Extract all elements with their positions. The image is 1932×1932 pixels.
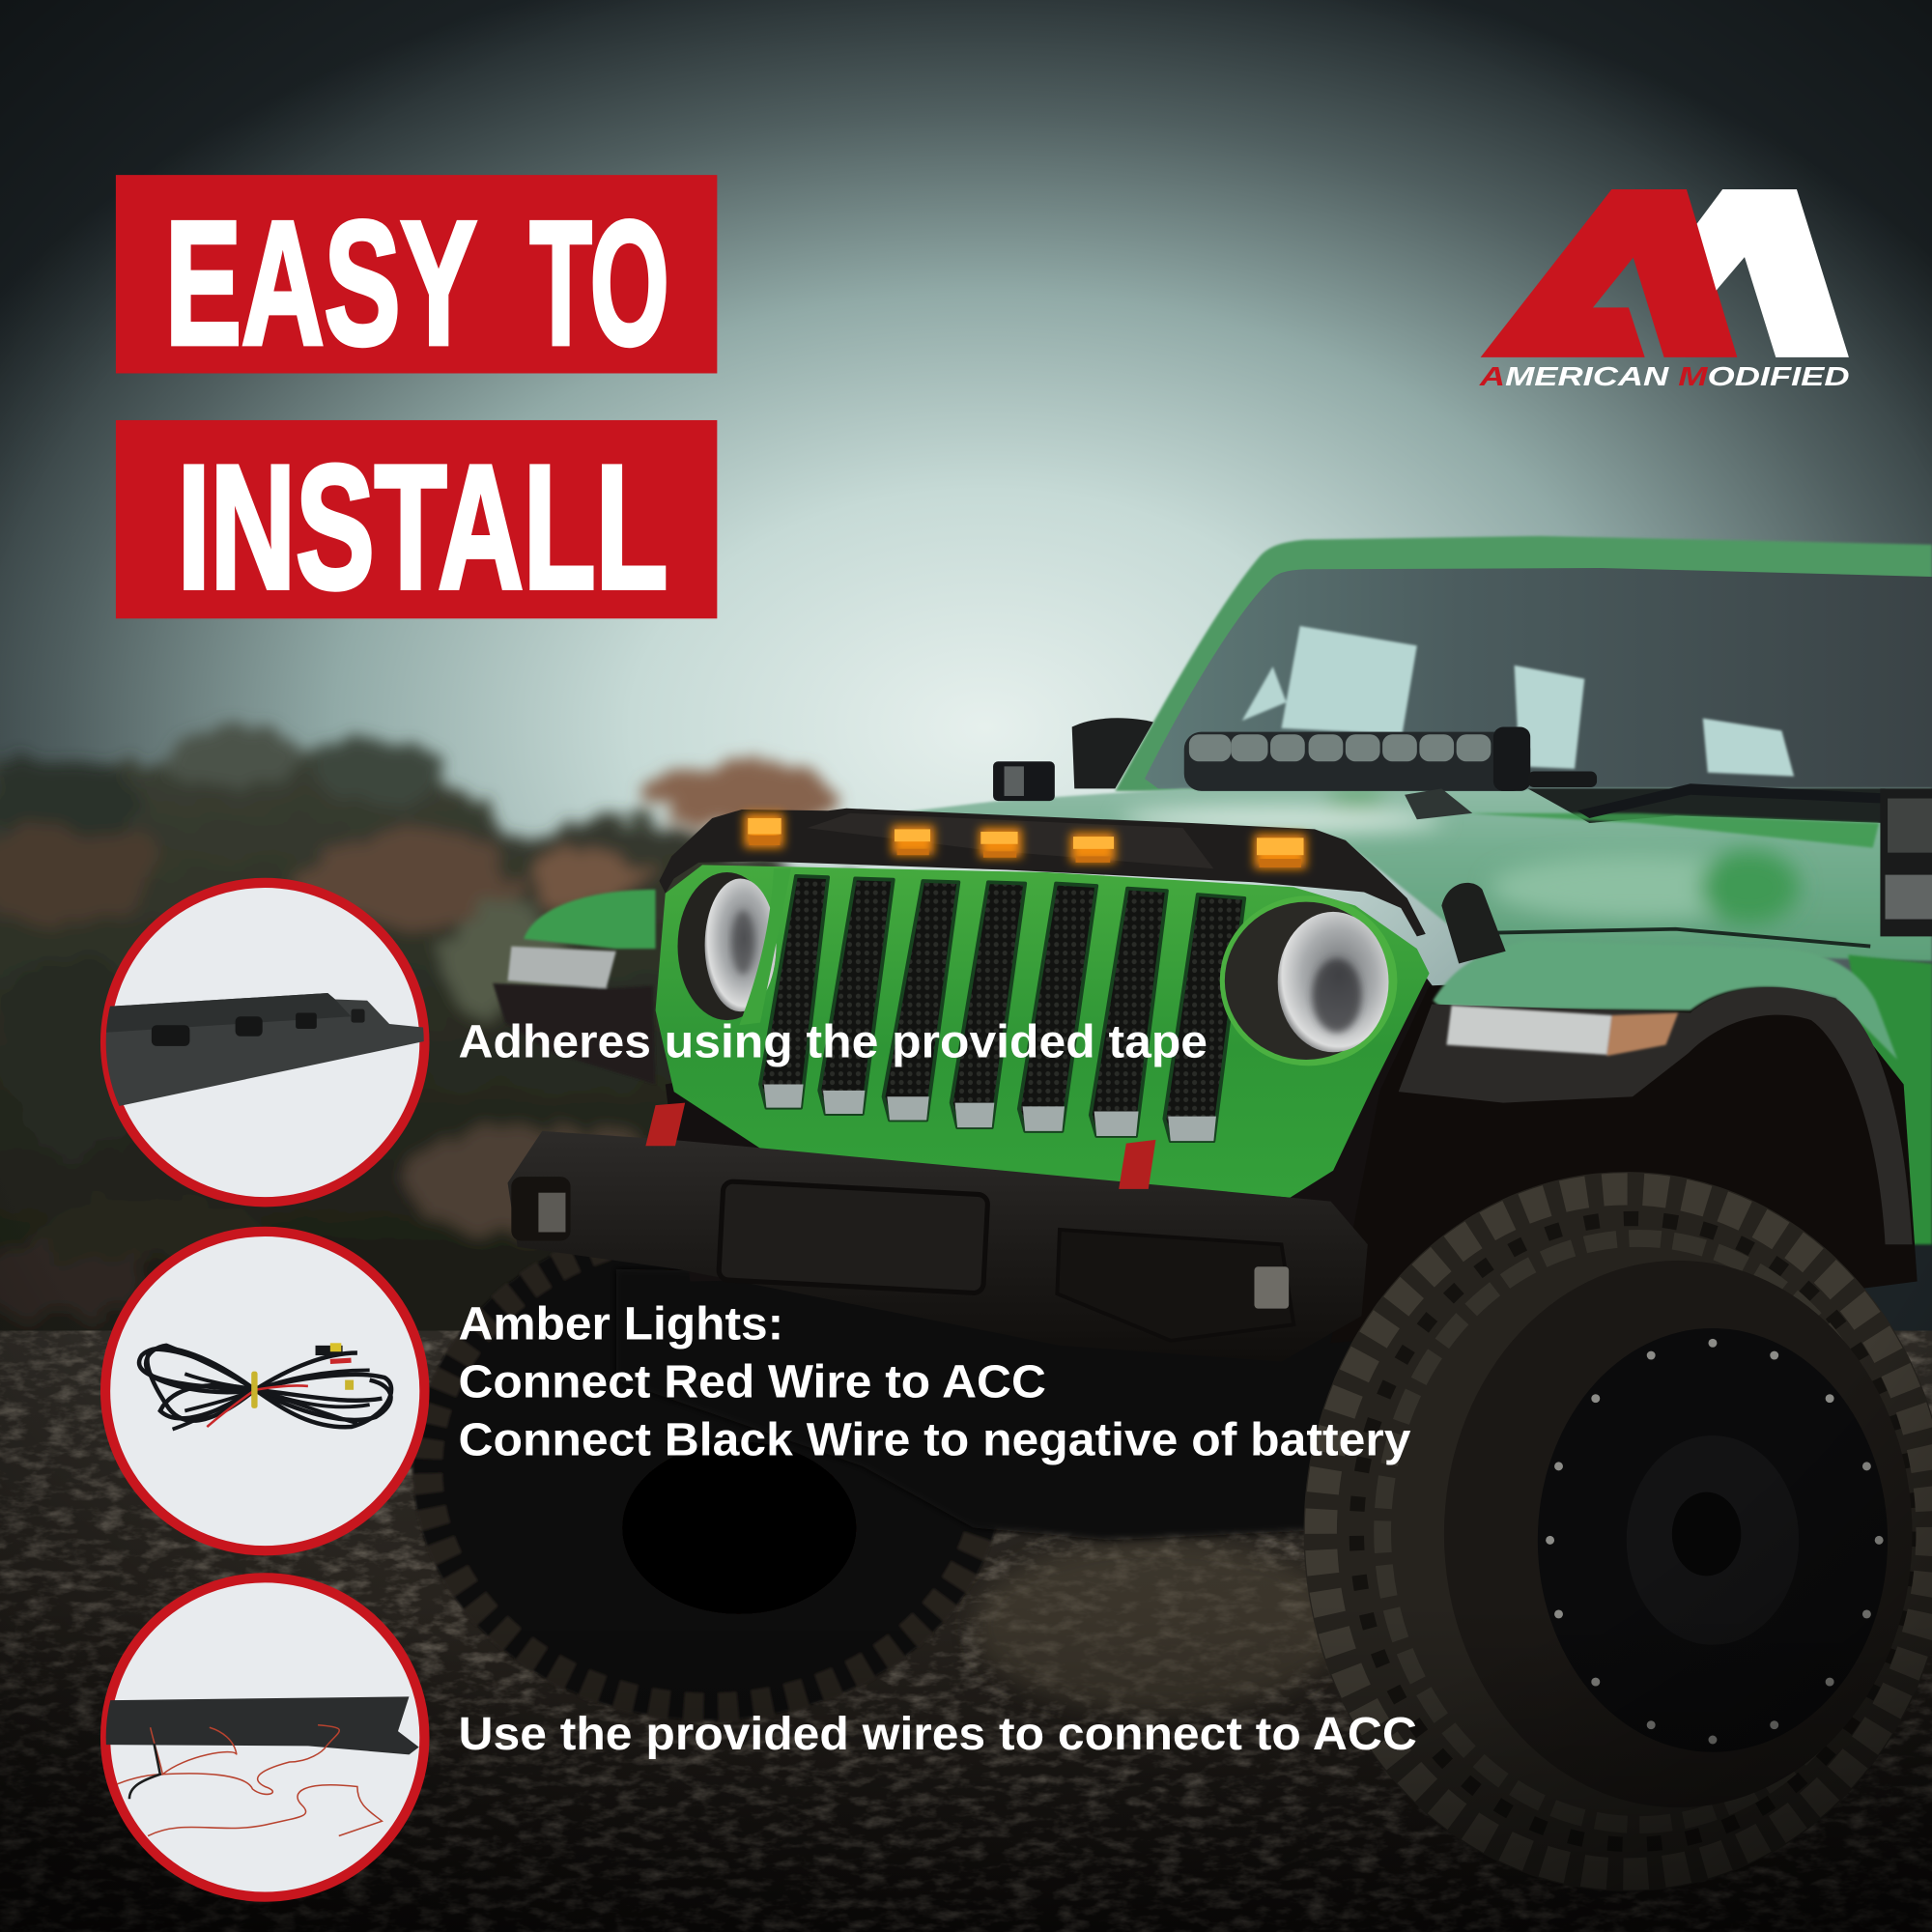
right body side — [1848, 955, 1932, 1244]
text: amber lights wiring instructions — [458, 1297, 1411, 1465]
text: amber lights wiring instructions: Connect Black Wire to negative of battery — [458, 1413, 1411, 1465]
bug deflector — [659, 809, 1426, 936]
bumper recess — [719, 1181, 988, 1293]
grille slots — [760, 876, 1244, 1141]
background: hills and rocks — [0, 730, 887, 1380]
undercarriage — [616, 1269, 1380, 1540]
left fender and lamp — [493, 890, 656, 1084]
right headlight — [1220, 895, 1397, 1065]
text: amber lights wiring instructions: Connect Red Wire to ACC — [458, 1355, 1046, 1407]
wheel arch interior — [1331, 974, 1918, 1343]
fog lights — [511, 1177, 1289, 1309]
panel: wires to ACC circle — [104, 1577, 424, 1897]
background: dirt ground — [0, 1331, 1932, 1932]
jeep photo illustration — [412, 536, 1932, 1891]
side mirror — [1072, 718, 1153, 788]
logo: American Modified — [1479, 189, 1850, 391]
cube light — [993, 761, 1055, 801]
heading: install — [116, 420, 717, 625]
heading: easy to: TO — [529, 185, 669, 382]
panel: wiring harness circle — [105, 1232, 424, 1550]
bumper — [508, 1131, 1368, 1361]
logo: American Modified: A MERICAN M ODIFIED — [1479, 361, 1850, 391]
hood — [788, 788, 1932, 961]
roof and windshield frame — [1115, 536, 1932, 801]
windshield reflections — [1242, 626, 1794, 777]
right front tire — [1303, 1172, 1932, 1891]
grille face — [656, 865, 1430, 1198]
wipers — [1577, 783, 1886, 818]
cowl — [1528, 788, 1886, 823]
hood rear trim — [1466, 813, 1879, 848]
left front tire — [412, 1217, 1005, 1720]
left headlight — [678, 868, 791, 1025]
icon: deflector with tape — [104, 993, 425, 1109]
red tow hooks — [645, 1103, 1155, 1189]
hood highlights — [1122, 793, 1799, 924]
right bumper block — [1057, 1230, 1293, 1341]
hood fold line — [1497, 929, 1870, 947]
heading: install: INSTALL — [178, 428, 668, 625]
turn signal lamp — [1446, 1006, 1678, 1056]
icon: deflector with wires — [104, 1696, 419, 1836]
text: adheres using tape: Adheres using the provided tape — [458, 1015, 1208, 1067]
right side LED pod — [1880, 788, 1932, 936]
amber lights — [744, 813, 1306, 868]
heading: easy to: EASY — [165, 185, 477, 382]
fender flare — [1399, 987, 1913, 1244]
windshield — [1145, 568, 1932, 795]
panel: tape product circle — [104, 883, 425, 1202]
roof light bar — [1184, 727, 1597, 819]
hood latch — [1441, 883, 1506, 963]
icon: wire bundle — [139, 1343, 391, 1430]
fender — [1433, 940, 1897, 1060]
text: use provided wires: Use the provided wires to connect to ACC — [458, 1708, 1417, 1760]
deflector raised center — [807, 813, 1213, 868]
front structure behind grille — [666, 949, 1441, 1282]
wheel bolts — [1546, 1339, 1884, 1744]
text: amber lights wiring instructions: Amber Lights: — [458, 1297, 783, 1350]
